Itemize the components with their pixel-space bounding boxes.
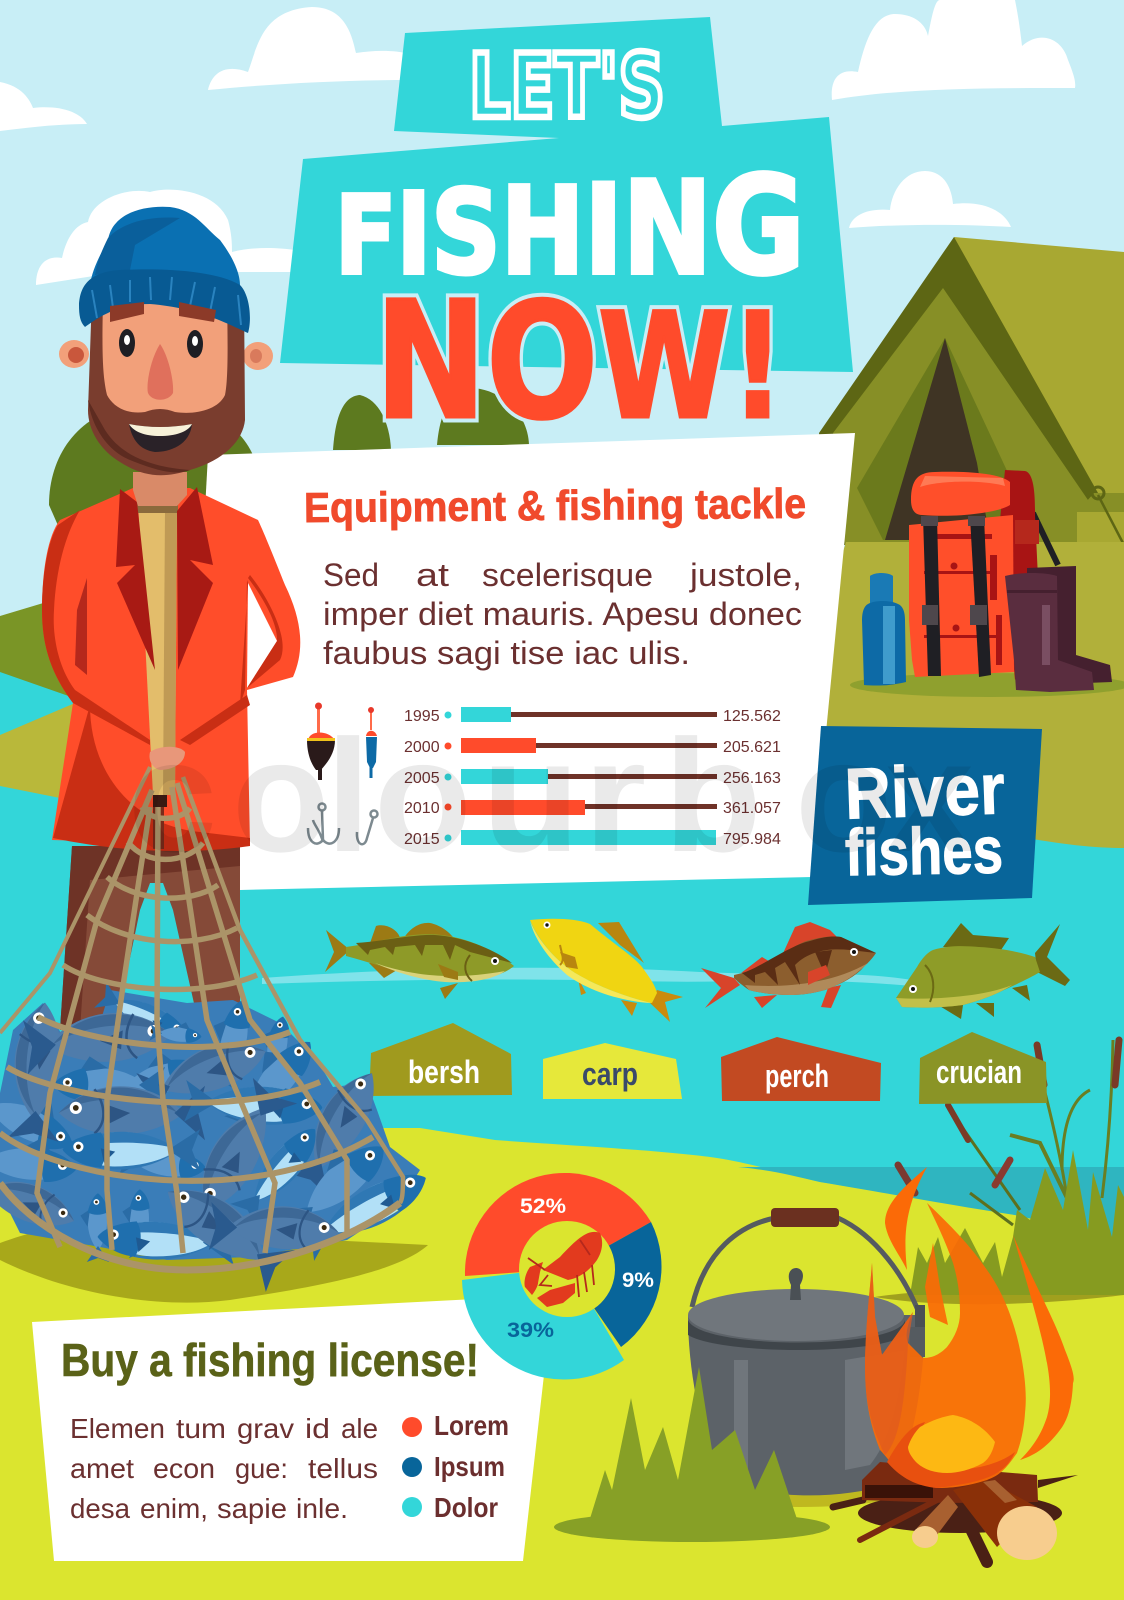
text block: equipment description: Sed [323, 557, 379, 593]
text block: license description [70, 1413, 378, 1524]
label: bersh [369, 1023, 512, 1096]
text block: license description: sapie [217, 1493, 287, 1524]
shirt [138, 502, 177, 795]
segment: 39% [462, 1269, 624, 1380]
fish: perch [701, 922, 876, 1008]
label: perch [721, 1037, 881, 1101]
text block: equipment description: imper diet mauris. Apesu donec [323, 596, 802, 632]
label: perch: perch [765, 1058, 829, 1094]
icon: single hook [357, 810, 378, 844]
legend: Lorem [434, 1410, 509, 1441]
text block: license description: econ [153, 1453, 215, 1484]
bar chart: 205.621 [723, 739, 781, 756]
text block: license description: ale [341, 1413, 378, 1444]
camping gear [850, 470, 1124, 697]
bar chart: 2015 [404, 831, 440, 848]
bar chart: 2010 [404, 800, 440, 817]
jacket [42, 487, 300, 851]
panel: title banners [280, 17, 853, 456]
fisherman [42, 207, 300, 1030]
bar chart: 256.163 [723, 770, 781, 787]
bar chart: 795.984 [723, 831, 781, 848]
campfire [833, 1167, 1078, 1562]
bar chart: 2005 [404, 770, 440, 787]
panel: buy a license [32, 1295, 553, 1561]
legend: Ipsum [434, 1451, 505, 1482]
label: crucian: crucian [936, 1054, 1022, 1090]
text block: license description: Elemen [70, 1413, 165, 1444]
boots [1005, 566, 1112, 692]
icon: lobster [525, 1232, 602, 1307]
net shadow on ground [0, 1227, 428, 1303]
watermark: colourbox [128, 706, 974, 885]
bar chart [404, 707, 781, 848]
legend: Dolor [434, 1492, 498, 1523]
lapels [116, 489, 155, 670]
text block: equipment description: justole, [689, 557, 802, 593]
text block: license description: desa [70, 1493, 130, 1524]
label: carp: carp [582, 1056, 638, 1092]
reeds [898, 1040, 1119, 1225]
donut chart: 39% [507, 1319, 554, 1342]
title: FISHING: FISHING [335, 148, 805, 306]
text block: license description: amet [70, 1453, 134, 1484]
bar chart: 125.562 [723, 708, 781, 725]
text block: license description: grav [237, 1413, 294, 1444]
icon: slim float [366, 707, 377, 778]
fish catch in net [0, 982, 436, 1292]
neck [133, 472, 187, 506]
cooking pot [685, 1208, 925, 1507]
text block: equipment description: scelerisque [482, 557, 653, 593]
bar chart: 2000 [404, 739, 440, 756]
icon: treble hook [308, 804, 339, 844]
title: NOW!: NOW! [375, 268, 785, 456]
fish: crucian [896, 923, 1070, 1019]
text block: equipment description: faubus sagi tise iac ulis. [323, 635, 690, 671]
eyebrows [110, 302, 216, 322]
tent [819, 237, 1124, 545]
title: LET'S: LET'S [469, 35, 665, 138]
legend [402, 1410, 509, 1523]
panel: river fishes: fishes [844, 813, 1004, 889]
backpack [909, 470, 1058, 680]
heading: license: Buy a fishing license! [61, 1334, 479, 1386]
panel: river fishes: River [843, 749, 1006, 835]
lime meadow [0, 1128, 1124, 1600]
thermos [862, 573, 906, 686]
text block: license description: tellus [308, 1453, 378, 1484]
bar chart: 361.057 [723, 800, 781, 817]
label: crucian [919, 1032, 1047, 1104]
fish: bersh [325, 923, 514, 999]
legs [60, 846, 240, 1030]
label: bersh: bersh [408, 1054, 480, 1090]
fishing net [0, 767, 403, 1270]
donut hole [519, 1221, 615, 1317]
text block: license description: inle. [296, 1493, 348, 1524]
donut chart [462, 1173, 662, 1380]
panel: river fishes [808, 726, 1042, 905]
donut chart: 9% [622, 1269, 654, 1292]
right grass [875, 1150, 1124, 1304]
logs [833, 1462, 1078, 1562]
donut chart: 52% [520, 1195, 566, 1218]
gear shadow [850, 673, 1124, 697]
text block: license description: id [305, 1413, 330, 1444]
bar chart: 1995 [404, 708, 440, 725]
fish: carp [530, 919, 683, 1022]
background tree hills [49, 388, 529, 530]
ears [59, 340, 273, 370]
shallow water shade [738, 1167, 1124, 1240]
head and beard [88, 295, 245, 475]
clouds [0, 0, 1075, 285]
water highlight [262, 968, 912, 986]
text block: equipment description [323, 557, 802, 671]
text block: license description: gue: [235, 1453, 288, 1484]
label: carp [543, 1043, 682, 1099]
hands [149, 747, 185, 770]
river [0, 672, 1124, 1272]
heading: equipment: Equipment & fishing tackle [304, 480, 806, 531]
icon: round float [307, 702, 335, 780]
title: NOW!: NOW! [375, 268, 785, 456]
text block: license description: enim, [140, 1493, 208, 1524]
left river banks [0, 598, 80, 800]
segment: 52% [465, 1173, 651, 1276]
right bank ground [800, 542, 1124, 848]
grass tuft [554, 1367, 830, 1542]
text block: equipment description: at [416, 557, 449, 593]
flames [865, 1167, 1074, 1488]
panel: equipment and tackle [200, 433, 855, 890]
segment: 9% [567, 1222, 662, 1347]
hat [79, 207, 250, 333]
text block: license description: tum [176, 1413, 226, 1444]
